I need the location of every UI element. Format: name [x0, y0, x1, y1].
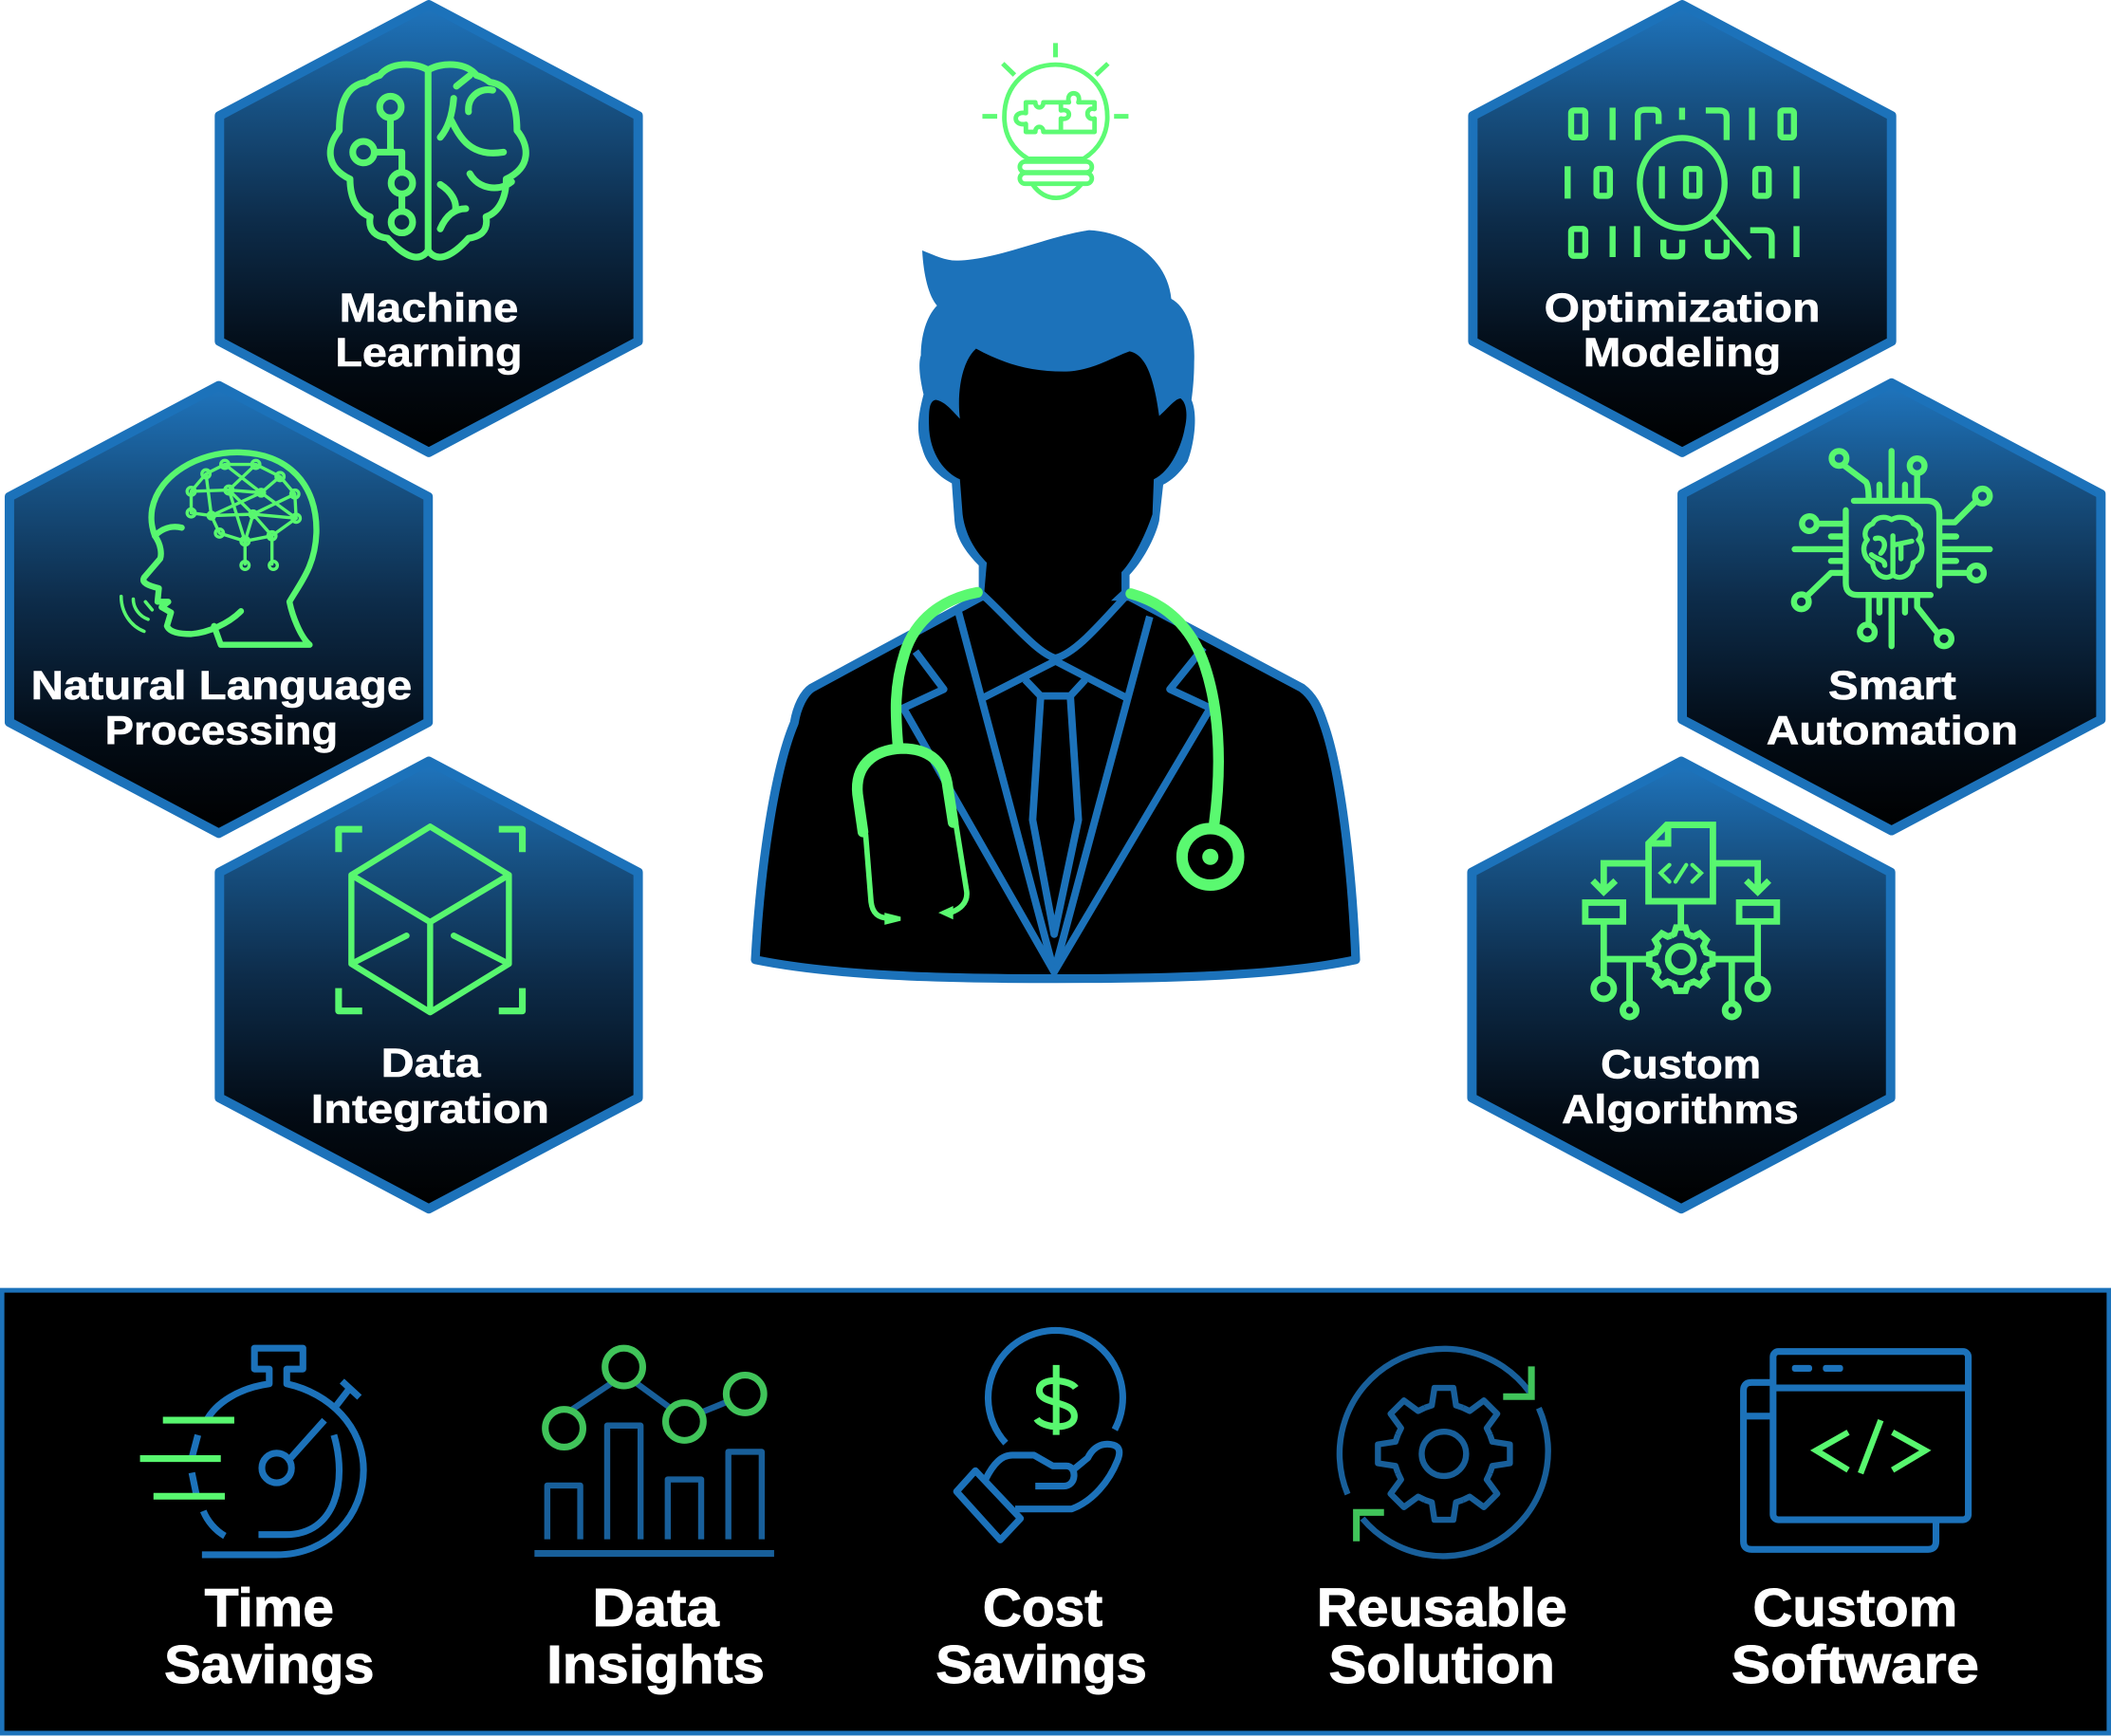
label: Solution — [1329, 1635, 1555, 1695]
heading: Optimization Modeling: Optimization — [1545, 286, 1820, 331]
icon: binary with magnifier — [1567, 108, 1797, 258]
label: Cost — [983, 1579, 1102, 1638]
heading: Machine Learning: Learning — [335, 330, 523, 376]
heading: Data Integration: Data — [381, 1041, 481, 1086]
panel: Optimization Modeling hexagon — [1472, 5, 1892, 452]
stethoscope — [858, 592, 1238, 925]
panel: Data Integration hexagon — [219, 761, 639, 1209]
benefit: Custom Software — [1731, 1352, 1979, 1695]
label: Software — [1731, 1635, 1979, 1695]
heading: Optimization Modeling: Modeling — [1583, 330, 1781, 376]
label: Data — [592, 1579, 719, 1638]
panel: benefits bar — [2, 1290, 2109, 1733]
suit lapels, collar and tie — [903, 594, 1211, 972]
label — [1317, 1579, 1567, 1695]
heading: Custom Algorithms: Custom — [1601, 1043, 1761, 1088]
hair and head outline — [918, 231, 1194, 600]
icon: gear with cycle arrows — [1340, 1349, 1548, 1556]
icon: stopwatch — [140, 1348, 363, 1555]
benefit: Data Insights — [534, 1348, 774, 1695]
label: Insights — [546, 1635, 765, 1695]
panel: Machine Learning hexagon — [219, 5, 639, 452]
label — [1731, 1579, 1979, 1695]
panel: Custom Algorithms hexagon — [1472, 761, 1891, 1209]
icon: code file flowchart — [1585, 825, 1777, 1017]
heading: Natural Language Processing: Processing — [105, 709, 338, 754]
icon: code windows — [1744, 1352, 1969, 1549]
heading: Natural Language Processing: Natural Language — [31, 663, 412, 709]
label: Reusable — [1317, 1579, 1567, 1638]
benefit: Reusable Solution — [1317, 1349, 1567, 1695]
heading: Smart Automation: Automation — [1767, 709, 2018, 754]
icon: AI chip brain — [1794, 451, 1990, 646]
label: Custom — [1753, 1579, 1957, 1638]
icon: hand holding coin — [956, 1330, 1122, 1540]
heading: Custom Algorithms: Algorithms — [1562, 1087, 1799, 1133]
panel: Natural Language Processing hexagon — [9, 386, 428, 833]
benefit: Time Savings — [140, 1348, 374, 1695]
heading: Natural Language Processing — [31, 663, 412, 754]
face silhouette — [929, 349, 1186, 652]
panel: Smart Automation hexagon — [1682, 383, 2101, 831]
heading: Data Integration — [311, 1041, 549, 1132]
label: Time — [205, 1579, 334, 1638]
heading: Data Integration: Integration — [311, 1086, 549, 1132]
benefit: Cost Savings — [935, 1330, 1147, 1695]
figure: doctor with stethoscope — [755, 231, 1356, 979]
icon: talking head with neural network — [121, 452, 317, 645]
heading: Machine Learning: Machine — [340, 286, 518, 331]
heading: Optimization Modeling — [1545, 286, 1820, 376]
heading: Custom Algorithms — [1562, 1043, 1799, 1133]
icon: cube in frame — [339, 826, 523, 1012]
label: Savings — [164, 1635, 374, 1695]
label — [546, 1579, 765, 1695]
heading: Smart Automation: Smart — [1828, 663, 1956, 709]
heading: Smart Automation — [1767, 663, 2018, 754]
label — [935, 1579, 1147, 1695]
icon: light bulb with puzzle — [982, 43, 1128, 198]
icon: circuit brain — [330, 65, 526, 257]
jacket body — [755, 597, 1356, 979]
icon: bar chart with line — [534, 1348, 774, 1554]
label: Savings — [935, 1635, 1147, 1695]
heading: Machine Learning — [335, 286, 523, 376]
label — [164, 1579, 374, 1695]
